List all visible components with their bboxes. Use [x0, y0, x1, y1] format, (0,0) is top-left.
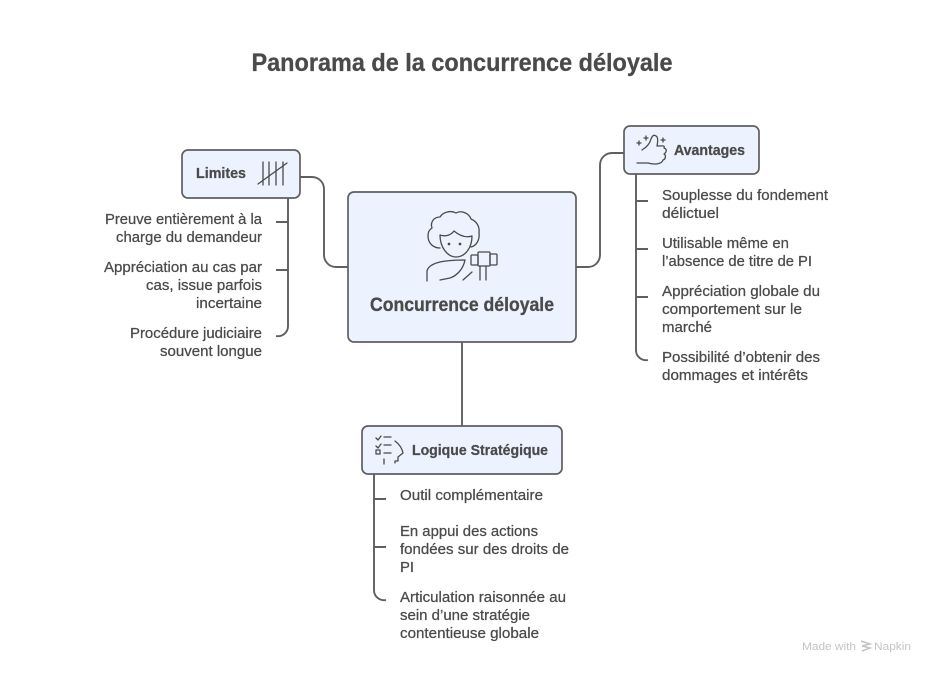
icon: thumbs up with sparkles [637, 135, 666, 164]
panel: central node [348, 192, 576, 342]
watermark: made with napkin: Napkin [874, 641, 911, 653]
header: avantages [624, 126, 759, 174]
central label: Concurrence déloyale [370, 295, 554, 316]
avantages list: Possibilité d’obtenir des [662, 350, 820, 366]
logique list: PI [400, 560, 414, 576]
avantages list: Utilisable même en [662, 236, 789, 252]
limites list: incertaine [196, 296, 262, 312]
avantages list [662, 188, 828, 384]
icon: person with gavel [427, 212, 497, 281]
header: avantages: Avantages [674, 142, 745, 159]
avantages list: délictuel [662, 206, 719, 222]
panel: logique stratégique [362, 426, 569, 642]
title: Panorama de la concurrence déloyale [252, 49, 673, 77]
logique list: fondées sur des droits de [400, 542, 569, 558]
header: limites [182, 150, 300, 198]
connectors from central node to branches [300, 153, 624, 426]
limites list: Preuve entièrement à la [105, 212, 263, 228]
limites list: souvent longue [160, 344, 262, 360]
limites tree lines [276, 198, 288, 336]
logique list: Articulation raisonnée au [400, 590, 566, 606]
avantages list: Souplesse du fondement [662, 188, 828, 204]
watermark: made with napkin: Made with [802, 641, 856, 653]
header: logique stratégique [362, 426, 562, 474]
avantages tree lines [636, 174, 648, 360]
icon: tally marks [258, 162, 287, 185]
panel: avantages [624, 126, 828, 384]
limites list [104, 212, 263, 360]
logique list: En appui des actions [400, 524, 538, 540]
watermark: made with napkin [802, 641, 911, 653]
header: limites: Limites [196, 165, 246, 182]
limites list: charge du demandeur [116, 230, 262, 246]
header: logique stratégique: Logique Stratégique [412, 442, 548, 459]
avantages list: marché [662, 320, 712, 336]
limites list: cas, issue parfois [146, 278, 262, 294]
avantages list: comportement sur le [662, 302, 802, 318]
logique list [400, 488, 569, 642]
logique list: contentieuse globale [400, 626, 539, 642]
logique list: sein d’une stratégie [400, 608, 530, 624]
icon: head with checklist [376, 436, 403, 464]
avantages list: l’absence de titre de PI [662, 254, 812, 270]
limites list: Appréciation au cas par [104, 260, 262, 276]
avantages list: dommages et intérêts [662, 368, 808, 384]
avantages list: Appréciation globale du [662, 284, 820, 300]
panel: limites [104, 150, 300, 360]
logique list: Outil complémentaire [400, 488, 543, 504]
logique tree lines [374, 474, 386, 600]
limites list: Procédure judiciaire [130, 326, 262, 342]
